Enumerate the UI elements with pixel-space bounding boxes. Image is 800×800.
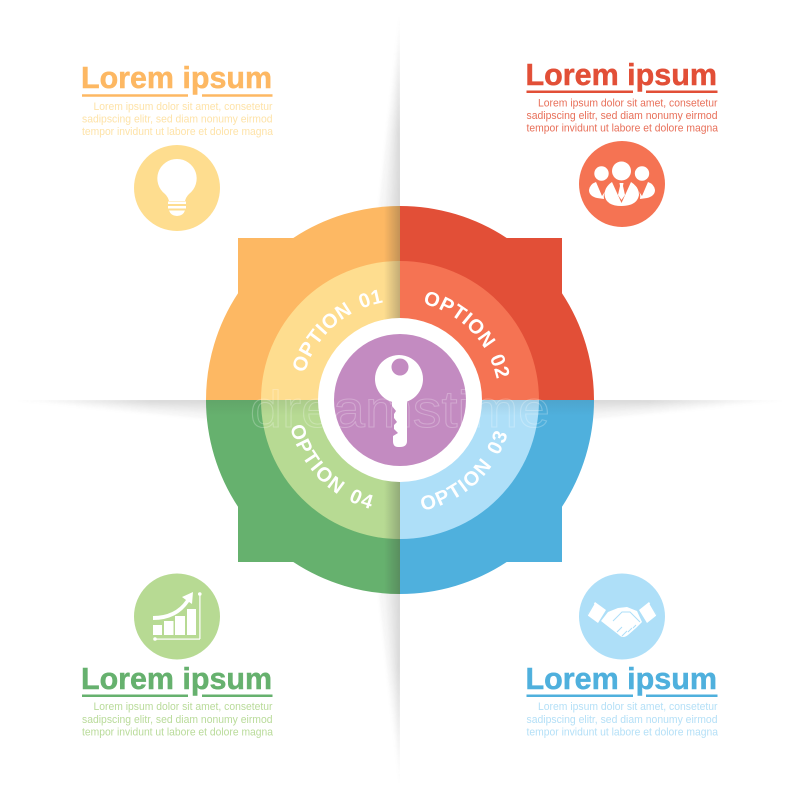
- body text: Lorem ipsum dolor sit amet, consetetur: [538, 701, 718, 713]
- ring segment: option 02: [400, 261, 539, 400]
- block: bottom-right: [526, 574, 721, 738]
- quadrant: blue: [400, 400, 594, 594]
- body text: tempor invidunt ut labore et dolore magna: [82, 726, 274, 738]
- heading underline: [82, 94, 272, 97]
- body text: sadipscing elitr, sed diam nonumy eirmod: [526, 110, 718, 122]
- purple hub: [334, 334, 466, 466]
- icon: light bulb: [134, 145, 220, 231]
- watermark: dreamstime: [250, 381, 550, 439]
- ring segment: option 04: [261, 400, 400, 539]
- heading underline: [82, 694, 272, 697]
- ring segment: option 03: [400, 400, 539, 539]
- label: option 03: OPTION 03: [421, 431, 507, 510]
- central diagram: [206, 206, 594, 594]
- icon: people: [579, 141, 665, 227]
- background fold shadows: [59, 52, 742, 748]
- icon: growth chart: [134, 574, 220, 660]
- body text: tempor invidunt ut labore et dolore magna: [526, 726, 719, 738]
- quadrant: red: [400, 206, 594, 400]
- body text: sadipscing elitr, sed diam nonumy eirmod: [82, 714, 272, 726]
- ring segment: option 01: [261, 261, 400, 400]
- body text: tempor invidunt ut labore et dolore magna: [526, 122, 719, 134]
- body text: Lorem ipsum dolor sit amet, consetetur: [94, 101, 273, 113]
- heading: Lorem ipsum: [81, 60, 272, 95]
- white hub ring: [318, 318, 482, 482]
- body text: tempor invidunt ut labore et dolore magna: [82, 126, 274, 138]
- heading: Lorem ipsum: [526, 661, 717, 696]
- icon: handshake: [579, 574, 665, 660]
- body text: Lorem ipsum dolor sit amet, consetetur: [94, 701, 273, 713]
- block: bottom-left: [81, 574, 276, 738]
- label: option 02: OPTION 02: [425, 292, 510, 378]
- quadrant: green: [206, 400, 400, 594]
- block: top-left: [81, 60, 276, 231]
- heading underline: [526, 90, 718, 93]
- heading: Lorem ipsum: [81, 661, 272, 696]
- heading: Lorem ipsum: [526, 57, 717, 92]
- label: option 01: OPTION 01: [293, 290, 383, 371]
- body text: sadipscing elitr, sed diam nonumy eirmod: [82, 114, 272, 126]
- heading underline: [526, 694, 718, 697]
- label: option 04: OPTION 04: [292, 425, 373, 508]
- body text: sadipscing elitr, sed diam nonumy eirmod: [526, 714, 718, 726]
- inner fold shadows: [206, 206, 594, 594]
- icon: key: [375, 355, 423, 447]
- body text: Lorem ipsum dolor sit amet, consetetur: [538, 98, 718, 110]
- block: top-right: [526, 57, 721, 227]
- quadrant: orange: [206, 206, 400, 400]
